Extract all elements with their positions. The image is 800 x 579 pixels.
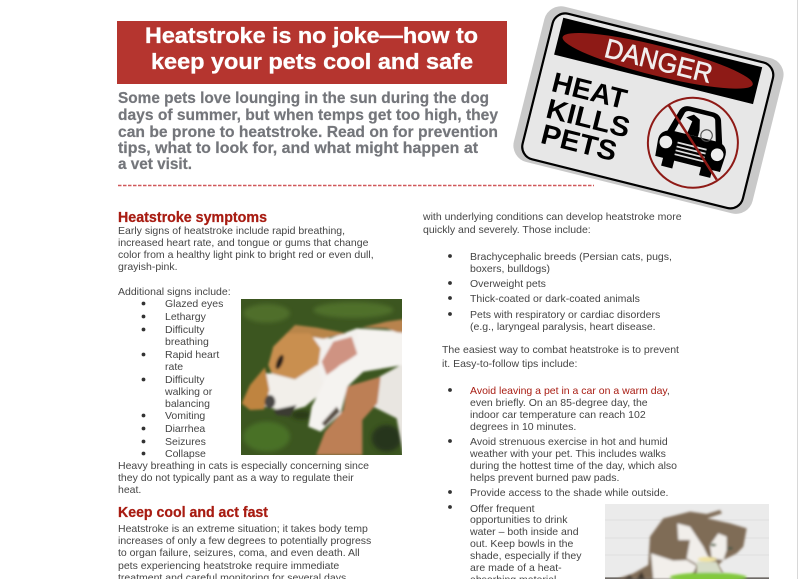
white body	[372, 363, 402, 455]
prevention intro	[442, 344, 679, 370]
prevention tips list: helps prevent burned paw pads.	[470, 472, 619, 484]
at-risk list: Pets with respiratory or cardiac disorders	[470, 309, 660, 321]
sign message	[536, 66, 640, 169]
sign header	[554, 18, 762, 104]
at-risk list	[448, 251, 672, 333]
muzzle	[265, 365, 325, 412]
intro text	[118, 90, 498, 173]
prevention tips list: degrees in 10 minutes.	[470, 421, 576, 433]
symptoms paragraph: grayish-pink.	[118, 261, 178, 273]
intro text: tips, what to look for, and what might happen at	[118, 140, 478, 157]
prevention tips list: water – both inside and	[469, 526, 579, 538]
at-risk list: Thick-coated or dark-coated animals	[470, 293, 640, 305]
back patch	[362, 318, 402, 334]
white chest	[677, 523, 710, 565]
prevention tips list: out. Keep bowls in the	[470, 538, 573, 550]
symptoms list	[142, 298, 223, 460]
intro text: can be prone to heatstroke. Read on for prevention	[118, 124, 498, 141]
keep cool paragraph: increases of only a few degrees to potentially progress	[118, 535, 371, 547]
prevention tips list: opportunities to drink	[470, 514, 568, 526]
prevention tips list: indoor car temperature can reach 102	[470, 409, 646, 421]
paw and leg	[308, 329, 410, 432]
no-car icon	[638, 88, 747, 197]
dark tail stripes	[623, 572, 645, 579]
symptoms list: breathing	[165, 336, 209, 348]
symptoms paragraph: color from a healthy light pink to bright red or even dull,	[118, 249, 374, 261]
prevention intro: The easiest way to combat heatstroke is to prevent	[442, 344, 679, 356]
fingers	[322, 337, 357, 375]
prevention tips list: Offer frequent	[470, 503, 535, 515]
photo: beagle on grass	[241, 299, 410, 455]
face blaze	[710, 533, 727, 560]
prevention tips list: shade, especially if they	[470, 550, 582, 562]
symptoms list: balancing	[165, 398, 210, 410]
symptoms list: Difficulty	[165, 324, 205, 336]
prevention tips list: Provide access to the shade while outside.	[470, 487, 668, 499]
symptoms list: rate	[165, 361, 183, 373]
at-risk list: Brachycephalic breeds (Persian cats, pugs,	[470, 251, 672, 263]
symptoms list: walking or	[164, 386, 213, 398]
keep cool paragraph: pets experiencing heatstroke require immediate	[118, 560, 339, 572]
right column intro: with underlying conditions can develop heatstroke more	[422, 211, 682, 223]
at-risk list: boxers, bulldogs)	[470, 263, 550, 275]
symptoms paragraph: Early signs of heatstroke include rapid breathing,	[118, 225, 345, 237]
prevention tips list: Avoid leaving a pet in a car on a warm day,	[470, 385, 670, 397]
sign header: DANGER	[602, 33, 716, 89]
eyes	[710, 544, 716, 546]
cat heavy breathing paragraph: heat.	[118, 484, 141, 496]
intro text: days of summer, but when temps get too high, they	[118, 107, 498, 124]
sign message: KILLS	[543, 93, 633, 144]
symptoms list: Diarrhea	[165, 423, 205, 435]
title banner: keep your pets cool and safe	[151, 49, 473, 74]
right column intro	[422, 211, 682, 236]
prevention tips list: during the hottest time of the day, which also	[470, 460, 677, 472]
symptoms paragraph	[118, 225, 374, 298]
keep cool paragraph: to organ failure, seizures, coma, and even death. All	[118, 547, 360, 559]
left ear	[242, 367, 269, 410]
head	[268, 333, 321, 379]
eye	[274, 354, 285, 370]
sign message: PETS	[538, 118, 620, 167]
title banner	[117, 21, 507, 84]
prevention tips list: Avoid strenuous exercise in hot and humid	[470, 436, 668, 448]
prevention tips list: weather with your pet. This includes walks	[469, 448, 666, 460]
prevention intro: it. Easy-to-follow tips include:	[442, 358, 577, 370]
symptoms paragraph: increased heart rate, and tongue or gums that change	[118, 237, 369, 249]
forearm	[316, 377, 381, 455]
symptoms list: Difficulty	[165, 374, 205, 386]
mouth	[273, 405, 297, 417]
at-risk list: (e.g., laryngeal paralysis, heart disease.	[470, 321, 656, 333]
keep cool paragraph	[118, 523, 371, 579]
symptoms list: Collapse	[165, 448, 206, 460]
symptoms list: Lethargy	[165, 311, 207, 323]
intro text: a vet visit.	[118, 156, 192, 173]
right column intro: quickly and severely. Those include:	[423, 224, 591, 236]
cat heavy breathing paragraph	[118, 460, 369, 496]
symptoms paragraph: Additional signs include:	[118, 286, 231, 298]
symptoms list: Vomiting	[165, 410, 205, 422]
cat heavy breathing paragraph: they do not typically pant as a way to regulate their	[118, 472, 354, 484]
prevention tips list: even briefly. On an 85-degree day, the	[470, 397, 648, 409]
at-risk list: Overweight pets	[470, 278, 546, 290]
danger sign	[510, 3, 787, 217]
cat heavy breathing paragraph: Heavy breathing in cats is especially concerning since	[118, 460, 369, 472]
symptoms list: Rapid heart	[165, 349, 219, 361]
prevention tips list	[448, 385, 677, 579]
top ear	[285, 325, 347, 339]
fountain	[670, 557, 747, 579]
nose	[265, 395, 275, 408]
symptoms list: Glazed eyes	[165, 298, 223, 310]
sign message: HEAT	[549, 66, 630, 115]
symptoms list: Seizures	[165, 436, 206, 448]
cat silhouette	[617, 510, 747, 579]
keep cool paragraph: Heatstroke is an extreme situation; it takes body temp	[118, 523, 368, 535]
photo: cat at water fountain	[605, 504, 769, 579]
prevention tips list: are made of a heat-	[470, 562, 562, 574]
white belly	[651, 553, 697, 579]
intro text: Some pets love lounging in the sun during the dog	[118, 90, 489, 107]
heading: heatstroke symptoms: Heatstroke symptoms	[118, 210, 267, 226]
title banner: Heatstroke is no joke—how to	[145, 23, 478, 48]
heading: keep cool and act fast: Keep cool and act fast	[118, 505, 268, 521]
